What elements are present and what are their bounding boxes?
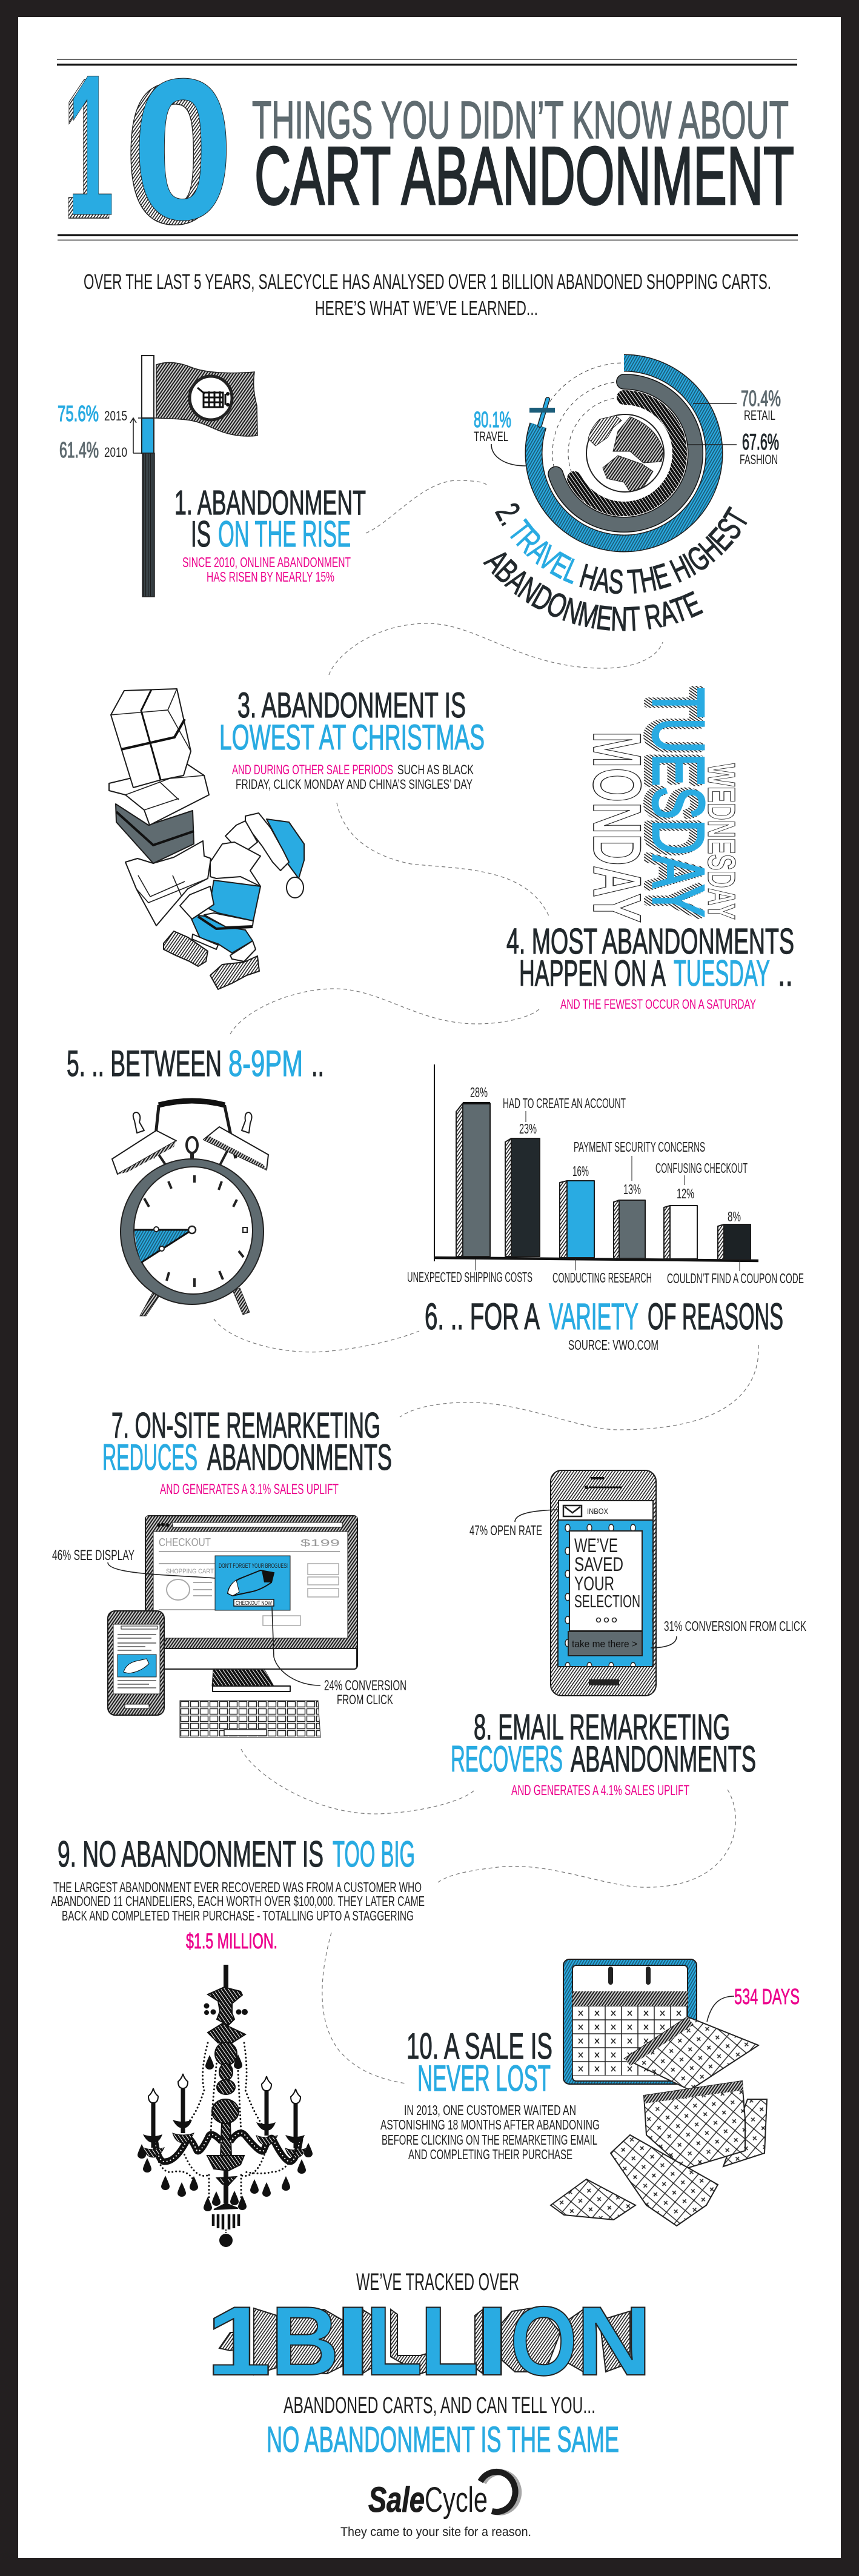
bar values: 23% (519, 1121, 537, 1137)
connector dashed 5 to 6 (214, 1319, 419, 1352)
body text 10: AND COMPLETING THEIR PURCHASE (408, 2146, 572, 2162)
heading 10: NEVER LOST (417, 2058, 551, 2099)
callout: 47% open rate: 47% OPEN RATE (469, 1522, 542, 1538)
body text 10: ASTONISHING 18 MONTHS AFTER ABANDONING (380, 2117, 600, 2133)
label: retail 70.4%: RETAIL (744, 408, 775, 423)
heading 8: RECOVERS (451, 1739, 563, 1779)
bar values (470, 1084, 741, 1224)
icon: desktop monitor checkout: $199 (300, 1538, 340, 1549)
panel: 3 lowest at christmas (109, 686, 485, 989)
body text 9: THE LARGEST ABANDONMENT EVER RECOVERED WAS FROM A CUSTOMER WHO (53, 1879, 422, 1895)
bar values: 8% (728, 1209, 741, 1224)
intro text: HERE’S WHAT WE’VE LEARNED... (315, 297, 538, 319)
rise arrow (130, 418, 156, 453)
label: travel 80.1%: 80.1% (474, 407, 511, 432)
big stat: 1 billion (206, 2286, 652, 2396)
big stat: 1 billion: O (510, 2286, 577, 2396)
title: text (252, 91, 794, 222)
body text 9: BACK AND COMPLETED THEIR PURCHASE - TOTALLING UPTO A STAGGERING (62, 1908, 414, 1924)
connector dashed 8 to 9 (438, 1790, 735, 1887)
connector dashed 7 to 8 (241, 1749, 474, 1814)
panel: 6 variety of reasons (407, 1064, 804, 1353)
callout: 24% conversion from click: 24% CONVERSION (324, 1678, 406, 1694)
header rules (57, 59, 798, 241)
big stat: 1 billion: L (365, 2286, 423, 2396)
connector dashed 3 to 4 (337, 803, 549, 917)
heading 7: 7. ON-SITE REMARKETING (111, 1406, 380, 1446)
panel: 10 a sale is never lost (380, 1959, 800, 2226)
logo: SaleCycle: Cycle (425, 2480, 488, 2520)
panel: 1 abandonment on the rise (58, 356, 366, 597)
bar labels (407, 1095, 804, 1286)
icon: rotated weekday words (579, 688, 743, 923)
heading 4 (506, 921, 794, 994)
heading 7: ABANDONMENTS (207, 1437, 392, 1478)
body text 10: IN 2013, ONE CUSTOMER WAITED AN (404, 2102, 576, 2118)
subtext 1 (182, 554, 351, 585)
chart: bar chart of reasons (434, 1064, 758, 1261)
stat: $1.5 million: $1.5 MILLION. (186, 1930, 277, 1953)
heading 2 curved: ABANDONMENT RATE (483, 552, 703, 631)
text: no abandonment is the same: NO ABANDONMENT IS THE SAME (267, 2420, 619, 2460)
bar values: 28% (470, 1084, 488, 1100)
popup: DON’T FORGET YOUR BROGUES! (219, 1562, 288, 1570)
icon: globe (586, 414, 664, 492)
heading 5: 8-9PM (228, 1043, 303, 1084)
icon: large phone email: SAVED (574, 1553, 623, 1575)
subtext 3: FRIDAY, CLICK MONDAY AND CHINA’S SINGLES’ DAY (236, 777, 473, 792)
heading 1: IS (191, 514, 211, 554)
icon: large phone email: WE’VE (574, 1535, 618, 1556)
callout: 31% conversion from click (651, 1618, 806, 1648)
bar values: 13% (623, 1181, 641, 1197)
panel: 5 between 8-9pm (67, 1043, 324, 1316)
stat: 75.6% 2015: 75.6% (58, 401, 99, 426)
subtext 7: AND GENERATES A 3.1% SALES UPLIFT (160, 1481, 339, 1498)
icon: keyboard (180, 1701, 320, 1738)
heading 5: 5. .. BETWEEN (67, 1043, 222, 1084)
panel: 2 travel highest (474, 354, 781, 631)
intro text (84, 270, 771, 319)
icon: chandelier (138, 1965, 313, 2247)
label: fashion 67.6% (688, 430, 779, 467)
big stat: 1 billion: 1 (206, 2286, 271, 2396)
big stat: 1 billion: B (271, 2286, 339, 2396)
subtext 1: HAS RISEN BY NEARLY 15% (207, 569, 334, 585)
heading 6 (425, 1296, 783, 1337)
connector dashed 2 to 3 (329, 623, 663, 675)
icon: large phone email (551, 1470, 656, 1696)
heading 4: TUESDAY (674, 953, 770, 994)
icon: large phone email: SELECTION (574, 1592, 640, 1612)
connector dashed 9 to 10 (322, 1933, 405, 2083)
heading 5: .. (311, 1043, 324, 1084)
connector dashed 6 to 7 (400, 1345, 758, 1430)
bar labels: CONDUCTING RESEARCH (552, 1270, 652, 1286)
panel: 7 onsite remarketing (52, 1406, 406, 1738)
label: fashion 67.6%: FASHION (740, 452, 778, 467)
callout: 24% conversion from click (272, 1607, 406, 1707)
text: abandoned carts: ABANDONED CARTS, AND CAN TELL YOU... (284, 2393, 595, 2418)
big stat: 1 billion: I (334, 2286, 371, 2396)
icon: santa with gifts (109, 689, 304, 989)
connector dashed 4 to 5 (230, 989, 540, 1034)
icon: rotated weekday words: WEDNESDAY (700, 763, 743, 920)
label: travel 80.1% (474, 407, 526, 466)
chart: radial rings (534, 363, 714, 543)
logo: SaleCycle: Sale (368, 2480, 425, 2520)
subtext 3 (232, 762, 474, 792)
heading 2 curved (483, 503, 748, 631)
logo: SaleCycle (368, 2472, 519, 2520)
stat: 61.4% 2010: 61.4% (59, 437, 99, 462)
body text 10: BEFORE CLICKING ON THE REMARKETING EMAIL (382, 2132, 597, 2148)
bar 13% (614, 1200, 645, 1258)
icon: calendar with flying pages (551, 1959, 767, 2226)
body text 9: ABANDONED 11 CHANDELIERS, EACH WORTH OVER $100,000. THEY LATER CAME (51, 1893, 425, 1909)
icon: desktop monitor checkout: SHOPPING CART (166, 1568, 214, 1575)
bar values: 16% (572, 1163, 589, 1179)
subtext 8: AND GENERATES A 4.1% SALES UPLIFT (511, 1782, 689, 1799)
icon: desktop monitor checkout: CHECKOUT (270, 1618, 295, 1625)
subtext 1: SINCE 2010, ONLINE ABANDONMENT (182, 554, 351, 570)
heading 9: TOO BIG (333, 1834, 415, 1874)
icon: plane (529, 399, 555, 425)
label: retail 70.4%: 70.4% (741, 386, 781, 411)
icon: alarm clock (112, 1101, 268, 1316)
callout: 534 days: 534 DAYS (734, 1984, 800, 2009)
title: big 10: 0 (132, 37, 234, 262)
callout: 24% conversion from click: FROM CLICK (337, 1692, 393, 1707)
bar labels: UNEXPECTED SHIPPING COSTS (407, 1269, 532, 1285)
bar 12% (664, 1206, 697, 1259)
popup: CHECKOUT NOW (236, 1600, 272, 1606)
icon: large phone email: take me there > (572, 1638, 637, 1650)
connector dashed 1 to 2 (366, 480, 488, 533)
heading 6: VARIETY (549, 1296, 638, 1337)
stat: 75.6% 2015: 2015 (104, 408, 127, 423)
big stat: 1 billion: N (576, 2286, 652, 2396)
heading 3: 3. ABANDONMENT IS (237, 686, 466, 725)
bar labels: HAD TO CREATE AN ACCOUNT (503, 1095, 626, 1111)
heading 4: HAPPEN ON A (519, 953, 666, 994)
title: big 10: 1 (68, 33, 114, 257)
big stat: 1 billion: L (420, 2286, 479, 2396)
panel: 8 email remarketing (451, 1470, 806, 1799)
heading 4: .. (778, 953, 793, 994)
bar 28% (456, 1103, 490, 1256)
icon: large phone email: INBOX (587, 1507, 608, 1516)
heading 2 curved: 2. TRAVEL HAS THE HIGHEST (494, 503, 748, 594)
icon: large phone email: YOUR (574, 1573, 614, 1595)
tagline: They came to your site for a reason. (340, 2525, 531, 2539)
heading 3: LOWEST AT CHRISTMAS (219, 718, 485, 757)
big stat: 1 billion: I (475, 2286, 509, 2396)
label: retail 70.4% (693, 386, 781, 423)
heading 1: ON THE RISE (218, 514, 351, 554)
bar 23% (505, 1138, 540, 1256)
heading 10 (406, 2026, 552, 2099)
label: fashion 67.6%: 67.6% (742, 430, 779, 454)
bar labels: PAYMENT SECURITY CONCERNS (574, 1139, 705, 1155)
heading 3 (219, 686, 485, 757)
icon: desktop monitor checkout (145, 1516, 357, 1691)
icon: desktop monitor checkout: CHECKOUT (159, 1536, 211, 1549)
icon: rotated weekday words: TUESDAY (637, 688, 720, 917)
heading 8 (451, 1707, 756, 1779)
icon: rotated weekday words: MONDAY (579, 731, 655, 923)
title: big 10 (63, 33, 234, 266)
stat: 61.4% 2010: 2010 (104, 445, 127, 460)
source: SOURCE: VWO.COM (568, 1337, 658, 1353)
text: we've tracked over: WE’VE TRACKED OVER (356, 2269, 519, 2295)
icon: flag with pole (142, 356, 257, 597)
body text 9 (51, 1879, 425, 1924)
bar values: 12% (677, 1186, 694, 1201)
callout: 46% see display: 46% SEE DISPLAY (52, 1547, 134, 1564)
title: big 10: 0 (124, 41, 227, 266)
heading 7 (102, 1406, 392, 1478)
bar labels: CONFUSING CHECKOUT (655, 1160, 748, 1176)
body text 10 (380, 2102, 600, 2162)
icon: small phone (108, 1611, 164, 1715)
panel: 4 tuesday (506, 688, 794, 1012)
bar 8% (718, 1224, 751, 1260)
heading 1: 1. ABANDONMENT (174, 483, 366, 522)
subtext 3: SUCH AS BLACK (397, 762, 474, 777)
title: big 10: 1 (63, 36, 111, 261)
heading 6: 6. .. FOR A (425, 1296, 540, 1337)
heading 7: REDUCES (102, 1437, 197, 1478)
callout: 46% see display (52, 1547, 215, 1578)
callout: 47% open rate (469, 1510, 559, 1538)
heading 9: 9. NO ABANDONMENT IS (58, 1834, 323, 1874)
popup (215, 1556, 290, 1610)
callout: 534 days (707, 1984, 800, 2022)
panel: footer (206, 2269, 652, 2539)
label: travel 80.1%: TRAVEL (474, 429, 508, 444)
icon: rotated weekday words: TUESDAY (632, 688, 715, 917)
bar 16% (560, 1181, 594, 1258)
heading 10: 10. A SALE IS (406, 2026, 552, 2066)
subtext 3: AND DURING OTHER SALE PERIODS (232, 762, 393, 777)
heading 1 (174, 483, 366, 554)
subtext 4: AND THE FEWEST OCCUR ON A SATURDAY (560, 997, 756, 1012)
panel: 9 no abandonment too big (51, 1834, 425, 2247)
